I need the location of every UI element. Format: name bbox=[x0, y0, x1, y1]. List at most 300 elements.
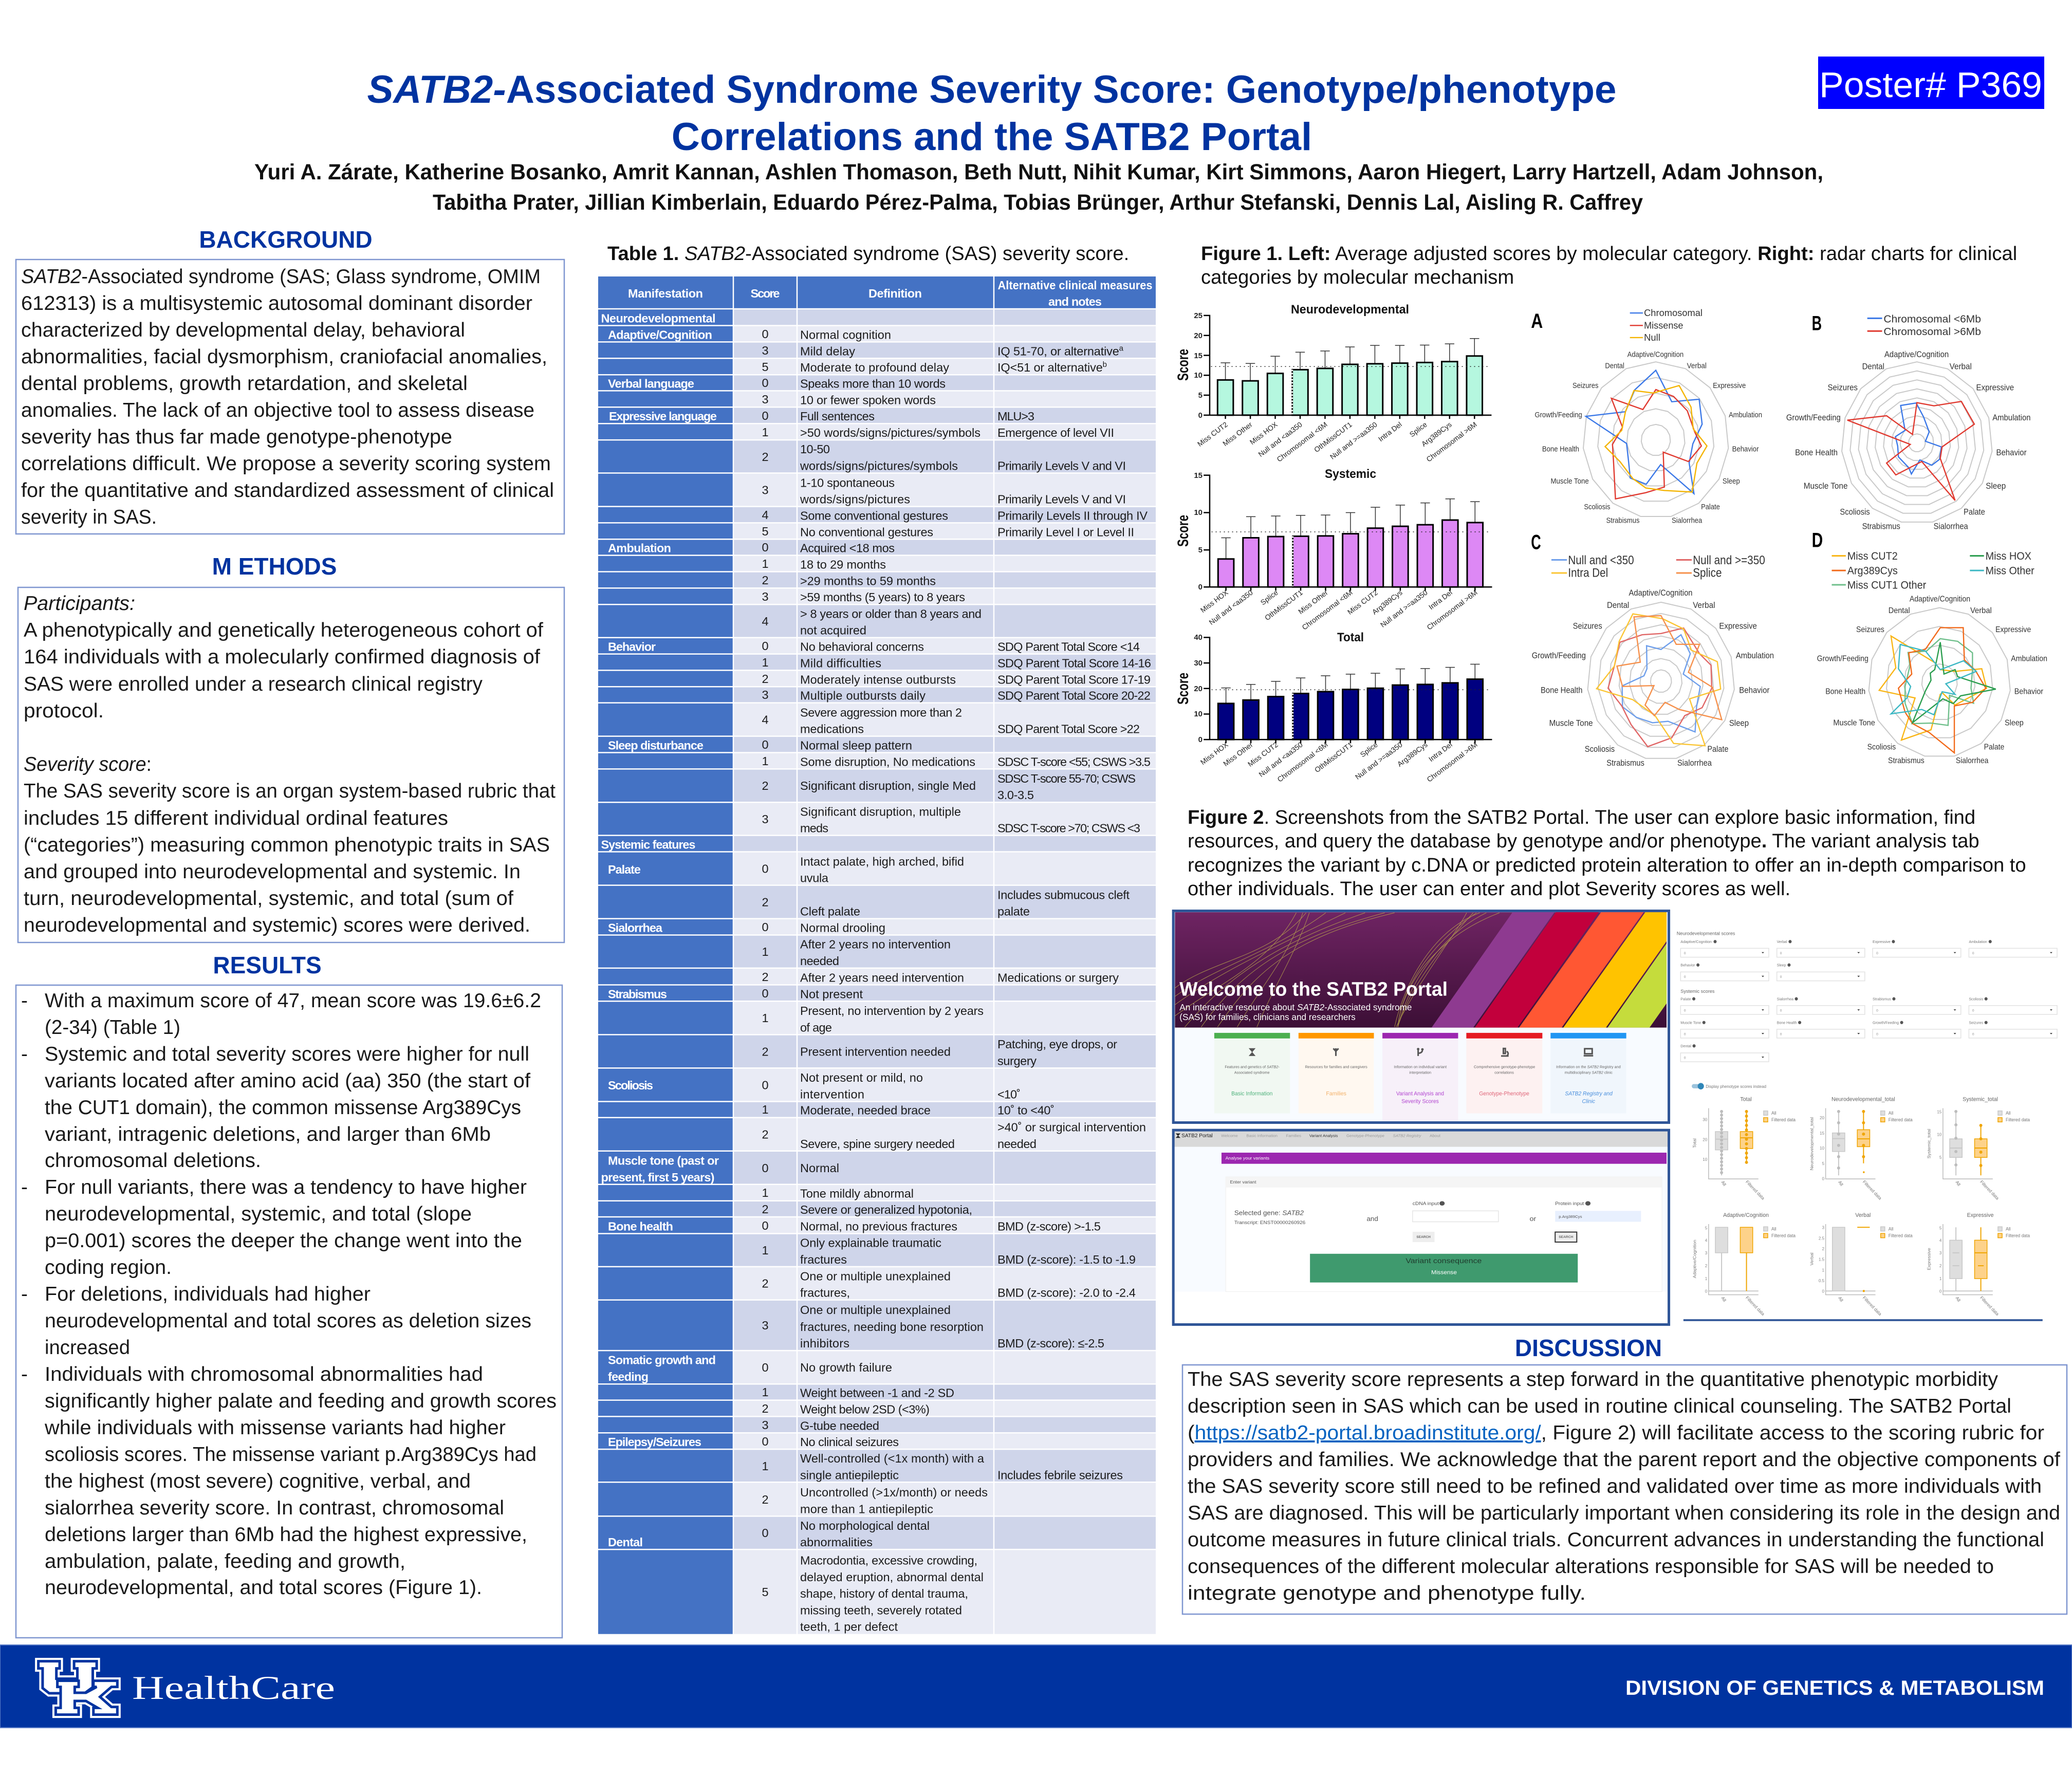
box plot: verbal: 0.5 bbox=[1819, 1279, 1824, 1283]
box plot: verbal: Filtered data bbox=[1889, 1233, 1913, 1238]
table rows: expressive language: Some conventional gestures bbox=[800, 509, 948, 522]
panel: results: variant, intragenic deletions, and larger than 6Mb bbox=[45, 1123, 491, 1145]
table rows: expressive language: Primarily Levels V and VI bbox=[997, 493, 1126, 506]
radar chart C: Seizures bbox=[1573, 621, 1602, 631]
panel: discussion: the SAS severity score still need to be refined and validated over time as more individuals with bbox=[1188, 1475, 2042, 1497]
table rows: somatic growth and feeding: 3 bbox=[762, 1418, 769, 1432]
table caption: Table 1. SATB2-Associated syndrome (SAS) severity score. bbox=[607, 243, 1129, 265]
bar chart: neurodevelopmental: 5 bbox=[1198, 391, 1202, 400]
bar chart: total: Miss Other bbox=[1222, 740, 1254, 768]
severity score form: Strabismus bbox=[1873, 996, 1891, 1001]
bar chart: total: 40 bbox=[1194, 633, 1202, 642]
radar chart D: Palate bbox=[1984, 742, 2004, 751]
table rows: palate: 2 bbox=[762, 895, 769, 909]
authors: Yuri A. Zárate, Katherine Bosanko, Amrit Kannan, Ashlen Thomason, Beth Nutt, Nihit Kumar, Kirt Simmons, Aaron Hiegert, Larry Hartzell, Adam Johnson, bbox=[254, 160, 1823, 184]
table rows: adaptive/cognition bbox=[608, 327, 1124, 374]
bar chart: neurodevelopmental: 25 bbox=[1194, 311, 1202, 320]
table rows: verbal language: 3 bbox=[762, 393, 769, 406]
radar chart C: Strabismus bbox=[1606, 758, 1644, 768]
table rows: sialorrhea: Normal drooling bbox=[800, 921, 885, 934]
banner wave lines bbox=[1175, 913, 1500, 1027]
figure 2 caption: Figure 2. Screenshots from the SATB2 Portal. The user can explore basic information, find bbox=[1188, 806, 1975, 828]
severity score form: 0 bbox=[1684, 975, 1686, 979]
portal nav bar: Variant Analysis bbox=[1309, 1134, 1338, 1138]
bar chart: total: Total bbox=[1337, 631, 1364, 644]
table rows: sleep disturbance: SDSC T-score <55; CSWS >3.5 bbox=[997, 755, 1151, 768]
table rows: behavior: SDQ Parent Total Score >22 bbox=[997, 723, 1140, 736]
radar chart C: Behavior bbox=[1739, 685, 1769, 695]
table rows: sialorrhea: Medications or surgery bbox=[997, 971, 1119, 985]
screenshot: severity score form and box plots bbox=[1677, 931, 2057, 1321]
table rows: palate: Intact palate, high arched, bifid bbox=[800, 855, 964, 868]
table rows: sleep disturbance: 0 bbox=[762, 738, 769, 751]
table rows: palate: 0 bbox=[762, 862, 769, 876]
panel: background bbox=[16, 260, 564, 534]
bar chart: neurodevelopmental: Miss CUT2 bbox=[1196, 420, 1229, 448]
bar chart: systemic: Chromosomal <6M bbox=[1300, 588, 1354, 632]
table rows: bone health: 0 bbox=[762, 1219, 769, 1232]
severity score form: Verbal bbox=[1777, 939, 1787, 944]
table rows: expressive language: Emergence of level VII bbox=[997, 426, 1114, 439]
wordmark: HealthCare: HealthCare bbox=[132, 1670, 335, 1707]
table header row: and notes bbox=[1048, 295, 1102, 308]
table rows: epilepsy/seizures: No clinical seizures bbox=[800, 1435, 899, 1449]
severity score form: Muscle Tone bbox=[1680, 1020, 1701, 1025]
bar chart: systemic: 5 bbox=[1198, 546, 1202, 554]
bar chart: total: Miss HOX bbox=[1199, 740, 1230, 766]
radar chart D: Ambulation bbox=[2011, 654, 2047, 663]
enter variant form: Selected gene: SATB2 bbox=[1234, 1209, 1304, 1216]
radar chart D: Expressive bbox=[1995, 625, 2031, 634]
table rows: sleep disturbance: meds bbox=[800, 822, 828, 835]
panel: results: deletions larger than 6Mb had the highest expressive, bbox=[45, 1524, 527, 1546]
table rows: behavior: 2 bbox=[762, 672, 769, 686]
panel: discussion: (https://satb2-portal.broadinstitute.org/ , Figure 2) will facilitate access to the scoring rubric for bbox=[1188, 1422, 2044, 1444]
box plot: neurodevelopmental total: 15 bbox=[1820, 1131, 1824, 1136]
radar chart D: Bone Health bbox=[1825, 687, 1865, 696]
box plot: total: All bbox=[1720, 1180, 1727, 1187]
table header row: Score bbox=[750, 287, 780, 300]
box plot: systemic total: Filtered data bbox=[2006, 1117, 2030, 1122]
radar chart B: Expressive bbox=[1976, 382, 2014, 392]
box plot: expressive: 0 bbox=[1939, 1289, 1942, 1293]
radar chart C: Sialorrhea bbox=[1677, 758, 1712, 768]
heading: discussion: DISCUSSION bbox=[1515, 1335, 1662, 1361]
analyse header bar: Analyse your variants bbox=[1226, 1156, 1270, 1160]
table rows: bone health: BMD (z-score): -1.5 to -1.9 bbox=[997, 1253, 1136, 1266]
radar chart B: Adaptive/Cognition bbox=[1884, 349, 1949, 359]
banner heading: An interactive resource about SATB2-Associated syndrome bbox=[1179, 1002, 1412, 1013]
table rows: expressive language: 10-50 bbox=[800, 442, 830, 456]
table rows: muscle tone: 0 bbox=[762, 1161, 769, 1175]
authors: Tabitha Prater, Jillian Kimberlain, Eduardo Pérez-Palma, Tobias Brünger, Arthur Stefanski, Dennis Lal, Aisling R. Caffrey bbox=[433, 190, 1643, 215]
table rows: sialorrhea: 2 bbox=[762, 970, 769, 984]
radar chart C: Growth/Feeding bbox=[1532, 651, 1586, 660]
box plot: neurodevelopmental total: Filtered data bbox=[1889, 1117, 1913, 1122]
bar chart: neurodevelopmental: Chromosomal >6M bbox=[1424, 420, 1478, 464]
table rows: expressive language: 5 bbox=[762, 525, 769, 538]
box plot: neurodevelopmental total: 20 bbox=[1820, 1116, 1824, 1120]
table rows: expressive language: >50 words/signs/pictures/symbols bbox=[800, 426, 980, 439]
box plot: adaptive/cognition: 3 bbox=[1705, 1251, 1708, 1255]
panel: methods bbox=[18, 587, 564, 942]
severity score form: Expressive bbox=[1873, 939, 1891, 944]
table rows: verbal language: 0 bbox=[762, 376, 769, 390]
panel: discussion: integrate genotype and phenotype fully. bbox=[1188, 1582, 1586, 1604]
table rows: dental: 5 bbox=[762, 1585, 769, 1599]
table rows: sleep disturbance: 2 bbox=[762, 779, 769, 792]
panel: methods: A phenotypically and genetically heterogeneous cohort of bbox=[24, 619, 543, 641]
table rows: sleep disturbance: Significant disruption, multiple bbox=[800, 805, 961, 818]
table rows: behavior: 4 bbox=[762, 713, 769, 727]
table rows: strabismus: surgery bbox=[997, 1054, 1037, 1067]
table rows: behavior: No behavioral concerns bbox=[800, 640, 924, 654]
portal nav bar: Welcome bbox=[1221, 1134, 1238, 1138]
bar chart: neurodevelopmental: 15 bbox=[1194, 351, 1202, 360]
box plot: systemic total: Filtered data bbox=[1979, 1179, 2000, 1201]
panel: methods: 164 individuals with a molecularly confirmed diagnosis of bbox=[24, 646, 540, 668]
bar chart: neurodevelopmental: Miss Other bbox=[1221, 420, 1254, 448]
enter variant form: Transcript: ENST00000260926 bbox=[1234, 1220, 1306, 1226]
radar chart D: Seizures bbox=[1856, 625, 1884, 634]
table rows: behavior: 3 bbox=[762, 688, 769, 701]
figure 1 caption: categories by molecular mechanism bbox=[1201, 266, 1514, 288]
variant consequence box bbox=[1310, 1254, 1578, 1283]
box plot: total: 30 bbox=[1703, 1118, 1708, 1122]
box plot: systemic total bbox=[1927, 1096, 2030, 1201]
box plot: expressive: 2 bbox=[1939, 1264, 1942, 1268]
bar chart: systemic: Null and >=aa350 bbox=[1379, 588, 1429, 629]
bar chart: total: OthMissCUT1 bbox=[1313, 740, 1354, 774]
panel: results: coding region. bbox=[45, 1256, 172, 1279]
panel: results: scoliosis scores. The missense variant p.Arg389Cys had bbox=[45, 1444, 536, 1466]
panel: background: anomalies. The lack of an objective tool to assess disease bbox=[21, 399, 534, 421]
table rows: somatic growth and feeding: G-tube needed bbox=[800, 1419, 879, 1432]
bar chart: systemic: OthMissCUT1 bbox=[1263, 588, 1304, 622]
severity score form: Seizures bbox=[1969, 1020, 1984, 1025]
card: registry and clinic: multidisciplinary SATB2 clinic bbox=[1565, 1070, 1613, 1075]
table rows: adaptive/cognition: IQ 51-70, or alternative bbox=[997, 344, 1119, 358]
radar chart D: Arg389Cys bbox=[1847, 564, 1898, 577]
box plot: neurodevelopmental total: All bbox=[1889, 1111, 1893, 1116]
table rows: expressive language: Primarily Level I or Level II bbox=[997, 525, 1134, 539]
banner heading: (SAS) for families, clinicians and researchers bbox=[1179, 1012, 1356, 1023]
bar chart: systemic: Arg389Cys bbox=[1371, 588, 1404, 616]
radar chart B: B bbox=[1812, 312, 1822, 335]
heading: methods: M ETHODS bbox=[212, 553, 337, 580]
panel: results: - bbox=[21, 1176, 28, 1198]
table rows: behavior: medications bbox=[800, 723, 864, 736]
table rows: sleep disturbance: Normal sleep pattern bbox=[800, 739, 912, 752]
table rows: expressive language: words/signs/pictures bbox=[800, 493, 910, 506]
table rows: behavior: Multiple outbursts daily bbox=[800, 689, 926, 702]
table rows: sialorrhea: 1 bbox=[762, 945, 769, 958]
table rows: bone health: 2 bbox=[762, 1276, 769, 1290]
radar chart B: Scoliosis bbox=[1840, 507, 1870, 516]
table rows: behavior: 1 bbox=[762, 656, 769, 669]
box plot: expressive: 1 bbox=[1939, 1276, 1942, 1281]
panel: results: With a maximum score of 47, mean score was 19.6±6.2 bbox=[45, 990, 541, 1012]
box plot: systemic total: Systemic_total bbox=[1963, 1096, 1998, 1102]
bar chart: systemic: Intra Del bbox=[1427, 588, 1454, 611]
bar chart: neurodevelopmental: Splice bbox=[1408, 420, 1429, 438]
card: families bbox=[1299, 1033, 1374, 1114]
box plot: expressive: Filtered data bbox=[1979, 1295, 2000, 1317]
panel: background: SATB2-Associated syndrome (SAS; Glass syndrome, OMIM bbox=[21, 266, 541, 288]
table rows: somatic growth and feeding: Weight between -1 and -2 SD bbox=[800, 1386, 954, 1400]
radar chart A: Muscle Tone bbox=[1550, 476, 1589, 486]
box plot: verbal: All bbox=[1889, 1226, 1893, 1232]
radar chart B: Sleep bbox=[1986, 480, 2006, 490]
footer band bbox=[0, 1645, 2072, 1728]
radar chart C: Expressive bbox=[1719, 621, 1757, 631]
card: basic information: Basic Information bbox=[1231, 1090, 1272, 1097]
panel: discussion bbox=[1182, 1365, 2067, 1614]
table rows: palate: Includes submucous cleft bbox=[997, 888, 1130, 901]
table rows: scoliosis: <10˚ bbox=[997, 1087, 1021, 1101]
card: variant analysis bbox=[1382, 1033, 1458, 1121]
bar chart: neurodevelopmental: 0 bbox=[1198, 411, 1202, 420]
icon: UK logo bbox=[39, 1661, 117, 1715]
table rows: sialorrhea: needed bbox=[800, 954, 839, 968]
radar chart B: Chromosomal >6Mb bbox=[1883, 326, 1981, 338]
table rows: scoliosis: intervention bbox=[800, 1087, 864, 1101]
bar chart: total: 0 bbox=[1198, 735, 1202, 744]
box plot: systemic total: 10 bbox=[1937, 1132, 1942, 1137]
radar chart B bbox=[1786, 312, 2031, 531]
table rows: expressive language: 1 bbox=[762, 425, 769, 439]
card: families: Families bbox=[1326, 1090, 1346, 1097]
table header row: Manifestation bbox=[628, 287, 703, 300]
table rows: scoliosis: Not present or mild, no bbox=[800, 1071, 923, 1084]
bar chart: neurodevelopmental: Null and <aa350 bbox=[1256, 420, 1304, 458]
table rows: adaptive/cognition: 5 bbox=[762, 360, 769, 374]
radar chart C: Intra Del bbox=[1568, 565, 1608, 580]
box plot: expressive: 5 bbox=[1939, 1226, 1942, 1230]
panel: results bbox=[16, 985, 562, 1638]
table rows: dental: delayed eruption, abnormal dental bbox=[800, 1570, 984, 1584]
box plot: adaptive/cognition: Adaptive/Cognition bbox=[1692, 1240, 1697, 1278]
box plot: expressive: 4 bbox=[1939, 1238, 1942, 1243]
bar chart: total: 10 bbox=[1194, 710, 1202, 718]
table rows: behavior: Moderately intense outbursts bbox=[800, 673, 956, 686]
banner heading bbox=[1179, 977, 1448, 1023]
box plot: total: All bbox=[1771, 1111, 1777, 1116]
table rows: strabismus: Patching, eye drops, or bbox=[997, 1038, 1117, 1051]
table rows: scoliosis: 2 bbox=[762, 1127, 769, 1141]
radar chart C: Null and >=350 bbox=[1693, 553, 1765, 567]
table rows: somatic growth and feeding: No growth failure bbox=[800, 1361, 892, 1374]
box plot: expressive: 3 bbox=[1939, 1251, 1942, 1255]
box plot: systemic total: All bbox=[1954, 1180, 1962, 1187]
box plot: expressive bbox=[1927, 1212, 2030, 1317]
panel: results: - bbox=[21, 1363, 28, 1385]
table rows: behavior: SDQ Parent Total Score <14 bbox=[997, 640, 1140, 654]
box plot: neurodevelopmental total: Filtered data bbox=[1862, 1179, 1883, 1201]
table rows: scoliosis: Moderate, needed brace bbox=[800, 1104, 931, 1117]
radar chart A: Scoliosis bbox=[1584, 502, 1611, 511]
panel: methods: SAS were enrolled under a research clinical registry bbox=[24, 673, 483, 695]
bar chart: systemic: Score bbox=[1175, 515, 1192, 547]
table rows: epilepsy/seizures: more than 1 antiepileptic bbox=[800, 1502, 933, 1515]
radar chart D: Sialorrhea bbox=[1956, 756, 1989, 765]
box plot: verbal: Filtered data bbox=[1862, 1295, 1883, 1317]
portal nav bar: SATB2 Portal bbox=[1181, 1133, 1213, 1139]
box plot: adaptive/cognition: 0 bbox=[1705, 1289, 1708, 1293]
table rows: epilepsy/seizures bbox=[608, 1435, 1123, 1515]
bar chart: neurodevelopmental: Miss HOX bbox=[1248, 420, 1279, 446]
table rows: ambulation: 2 bbox=[762, 574, 769, 587]
box plot: total: Filtered data bbox=[1745, 1179, 1766, 1201]
table rows: strabismus: of age bbox=[800, 1021, 832, 1034]
table rows: ambulation: not acquired bbox=[800, 624, 866, 637]
table rows: ambulation: 18 to 29 months bbox=[800, 558, 886, 571]
banner heading: Welcome to the SATB2 Portal bbox=[1179, 977, 1448, 1000]
box plot: expressive: Expressive bbox=[1927, 1248, 1932, 1270]
table rows: behavior: SDQ Parent Total Score 20-22 bbox=[997, 689, 1151, 702]
radar chart B: Strabismus bbox=[1862, 521, 1900, 531]
radar chart D: D bbox=[1812, 529, 1823, 552]
severity score form: 0 bbox=[1972, 952, 1974, 955]
table rows: bone health: 3 bbox=[762, 1319, 769, 1332]
panel: results: For deletions, individuals had higher bbox=[45, 1283, 371, 1305]
severity score form: Dental bbox=[1680, 1044, 1691, 1048]
table rows: ambulation: Ambulation bbox=[608, 542, 671, 555]
table rows: behavior: Behavior bbox=[608, 640, 656, 654]
box plot: verbal: Verbal bbox=[1809, 1252, 1814, 1266]
card: variant analysis: Severity Scores bbox=[1401, 1098, 1439, 1104]
division name: DIVISION OF GENETICS & METABOLISM bbox=[1625, 1677, 2044, 1699]
table rows: epilepsy/seizures: 0 bbox=[762, 1435, 769, 1448]
bar chart: total: Score bbox=[1175, 673, 1192, 705]
table rows: adaptive/cognition: 3 bbox=[762, 344, 769, 357]
bar chart: systemic: 0 bbox=[1198, 583, 1202, 591]
table rows: bone health: BMD (z-score): ≤-2.5 bbox=[997, 1337, 1104, 1350]
enter variant form: Protein input bbox=[1555, 1201, 1584, 1207]
panel: discussion: outcome measures in future clinical trials. Concurrent advances in understanding the functional bbox=[1188, 1529, 2044, 1551]
variant consequence box: Variant consequence bbox=[1405, 1257, 1482, 1265]
box plot: systemic total: Systemic_total bbox=[1927, 1129, 1932, 1158]
panel: discussion: The SAS severity score represents a step forward in the quantitative phenotypic morbidity bbox=[1188, 1368, 1999, 1391]
box plot: systemic total: 15 bbox=[1937, 1109, 1942, 1115]
table rows: dental: 0 bbox=[762, 1526, 769, 1540]
table rows: bone health: Bone health bbox=[608, 1220, 673, 1233]
severity score form: 0 bbox=[1684, 952, 1686, 955]
table rows: expressive language: No conventional gestures bbox=[800, 525, 933, 539]
severity score form: 0 bbox=[1876, 952, 1878, 955]
table rows: behavior bbox=[608, 639, 1151, 736]
table rows: epilepsy/seizures: Epilepsy/Seizures bbox=[608, 1435, 701, 1449]
table rows: muscle tone bbox=[601, 1154, 972, 1216]
radar chart A: Null bbox=[1644, 332, 1660, 343]
severity score form bbox=[1677, 931, 2057, 1062]
box plot: total: 20 bbox=[1703, 1137, 1708, 1142]
radar chart B: Ambulation bbox=[1992, 413, 2031, 422]
radar chart D: Growth/Feeding bbox=[1817, 654, 1868, 663]
panel: methods: turn, neurodevelopmental, systemic, and total (sum of bbox=[24, 887, 513, 910]
banner coloured stripes bbox=[1432, 912, 1667, 1028]
enter variant form: and bbox=[1366, 1215, 1378, 1223]
table rows: somatic growth and feeding: Weight below 2SD (<3%) bbox=[800, 1402, 930, 1416]
panel: background: dental problems, growth retardation, and skeletal bbox=[21, 373, 468, 395]
table rows: expressive language: 3 bbox=[762, 483, 769, 496]
bar chart: total: Miss CUT2 bbox=[1246, 740, 1280, 768]
bar chart: neurodevelopmental: Null and >=aa350 bbox=[1328, 420, 1379, 461]
box plot: verbal: 3 bbox=[1822, 1225, 1824, 1230]
table rows: expressive language: Primarily Levels II through IV bbox=[997, 509, 1148, 522]
panel: methods: neurodevelopmental and systemic) scores were derived. bbox=[24, 914, 530, 936]
box plot: total bbox=[1692, 1096, 1796, 1201]
bar chart: neurodevelopmental bbox=[1175, 303, 1491, 464]
radar chart A: Strabismus bbox=[1606, 516, 1639, 525]
table rows: ambulation: Acquired <18 mos bbox=[800, 542, 895, 555]
bar chart: total: Splice bbox=[1359, 740, 1379, 758]
table rows: muscle tone: Severe or generalized hypotonia, bbox=[800, 1203, 972, 1216]
radar chart A: Ambulation bbox=[1729, 410, 1762, 419]
radar chart B: Bone Health bbox=[1795, 448, 1838, 457]
box plot: verbal: 0 bbox=[1822, 1289, 1824, 1293]
panel: methods: protocol. bbox=[24, 700, 104, 722]
enter variant form: SEARCH bbox=[1559, 1235, 1573, 1239]
panel: methods: and grouped into neurodevelopmental and systemic. In bbox=[24, 861, 521, 883]
radar chart A: Missense bbox=[1644, 320, 1683, 331]
card: registry and clinic: Clinic bbox=[1582, 1098, 1595, 1104]
card: registry and clinic: Information on the SATB2 Registry and bbox=[1556, 1065, 1621, 1069]
table: severity score bbox=[598, 276, 1156, 1634]
panel: methods: Severity score: bbox=[24, 753, 152, 775]
bar chart: neurodevelopmental: 20 bbox=[1194, 331, 1202, 340]
radar chart A: Dental bbox=[1605, 361, 1624, 370]
table rows: bone health: Only explainable traumatic bbox=[800, 1236, 941, 1250]
table rows: strabismus: 0 bbox=[762, 987, 769, 1000]
box plot: adaptive/cognition: All bbox=[1720, 1296, 1727, 1303]
table rows: epilepsy/seizures: Uncontrolled (>1x/month) or needs bbox=[800, 1486, 988, 1499]
bar chart: total: Chromosomal <6M bbox=[1275, 741, 1329, 784]
bar chart: total: Arg389Cys bbox=[1396, 741, 1429, 768]
heading: background: BACKGROUND bbox=[199, 226, 373, 253]
table rows: scoliosis: 10˚ to <40˚ bbox=[997, 1104, 1054, 1117]
box plot: adaptive/cognition: Filtered data bbox=[1771, 1233, 1796, 1238]
box plot: total: Total bbox=[1692, 1138, 1697, 1148]
severity score form: Systemic scores bbox=[1680, 989, 1715, 994]
table rows: dental bbox=[608, 1519, 984, 1634]
card: variant analysis: Information on individual variant bbox=[1394, 1065, 1447, 1069]
bar chart: systemic bbox=[1175, 467, 1492, 632]
bar chart: neurodevelopmental: 10 bbox=[1194, 371, 1202, 380]
radar chart C: Palate bbox=[1707, 744, 1728, 753]
box plot: verbal: 1.5 bbox=[1819, 1257, 1824, 1262]
severity score form: 0 bbox=[1684, 1009, 1686, 1012]
table rows: expressive language: words/signs/pictures/symbols bbox=[800, 459, 958, 473]
panel: results: neurodevelopmental and total scores as deletion sizes bbox=[45, 1310, 531, 1332]
table rows: dental: abnormalities bbox=[800, 1535, 873, 1549]
box plot: verbal bbox=[1809, 1212, 1913, 1317]
radar chart A: Behavior bbox=[1732, 445, 1759, 453]
portal nav bar: About bbox=[1430, 1134, 1441, 1138]
phenotype toggle: Display phenotype scores instead bbox=[1706, 1084, 1766, 1089]
box plot: verbal: 2 bbox=[1822, 1247, 1824, 1251]
bar chart: total: Null and <aa350 bbox=[1257, 740, 1304, 779]
box plot: expressive: All bbox=[2006, 1226, 2011, 1232]
panel: results: (2-34) (Table 1) bbox=[45, 1016, 180, 1039]
analyse header bar bbox=[1222, 1153, 1667, 1164]
table rows: scoliosis: >40˚ or surgical intervention bbox=[997, 1120, 1146, 1134]
figure 2 caption bbox=[1188, 806, 2026, 900]
table rows: bone health: inhibitors bbox=[800, 1337, 849, 1350]
card: genotype-phenotype bbox=[1466, 1033, 1542, 1114]
table rows: muscle tone: 2 bbox=[762, 1202, 769, 1216]
table rows: somatic growth and feeding bbox=[608, 1354, 954, 1432]
